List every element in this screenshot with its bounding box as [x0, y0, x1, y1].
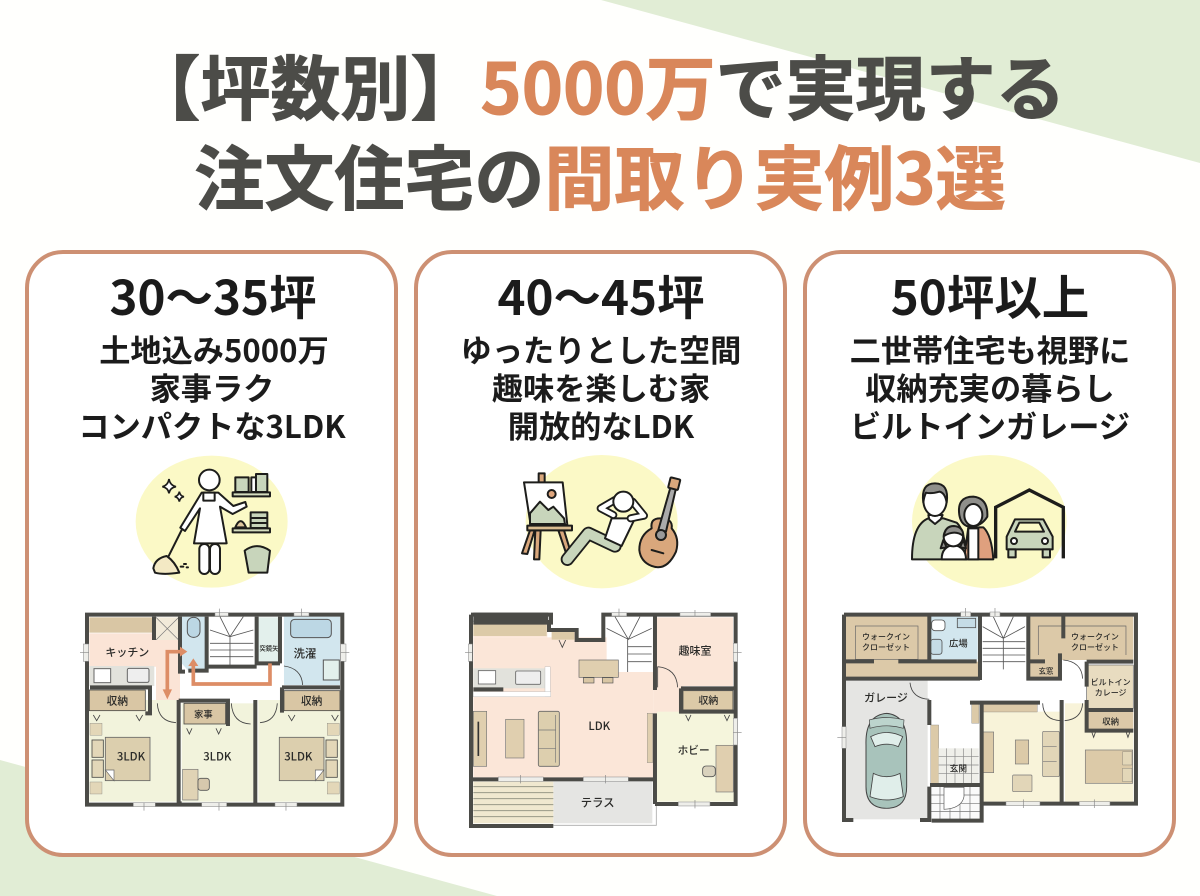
floor plan: 3LDK: 3LDK [117, 749, 146, 765]
floor plan: garage house [837, 608, 1136, 822]
panel description: コンパクトな3LDK [78, 402, 346, 447]
floor plan: 3LDK: 3LDK [284, 749, 313, 765]
title line 1: 【坪数別】5000万で実現する [130, 34, 1066, 135]
floor plan: 3LDK: 突鏡矢 [259, 644, 279, 653]
floor plan: garage house: ウォークイン [862, 631, 910, 642]
floor plan: garage house: 玄窓 [1039, 665, 1054, 676]
background: top-right green wedge [601, 0, 1200, 163]
panel: 50+ tsubo [805, 252, 1174, 855]
background: bottom-left green wedge [0, 760, 497, 896]
panel description: 趣味を楽しむ家 [492, 364, 710, 409]
floor plan: garage house: 収納 [1102, 715, 1119, 727]
icon: housework [136, 456, 288, 588]
floor plan: LDK: ホビー [678, 743, 710, 758]
panel description: ゆったりとした空間 [461, 326, 741, 371]
panel: 40-45 tsubo [416, 252, 785, 855]
panel description: 土地込み5000万 [99, 326, 329, 371]
floor plan: 3LDK: 家事 [194, 706, 213, 720]
panel frame [416, 252, 785, 855]
floor plan: LDK [465, 609, 742, 826]
panel frame [27, 252, 396, 855]
floor plan: LDK: 収納 [698, 692, 718, 707]
title line 2: 注文住宅の間取り実例3選 [194, 124, 1006, 225]
floor plan: LDK: LDK [588, 718, 611, 734]
floor plan: garage house: ウォークイン [1071, 631, 1119, 642]
panel description: ビルトインガレージ [850, 402, 1130, 447]
title [130, 34, 1066, 225]
floor plan: 3LDK: 3LDK [203, 749, 232, 765]
floor plan: 3LDK: キッチン [105, 644, 149, 660]
floor plan: garage house: クローゼット [1071, 642, 1119, 653]
floor plan: garage house: ガレージ [864, 689, 908, 705]
panel description [850, 326, 1130, 447]
panel description [78, 326, 346, 447]
floor plan: garage house: 広場 [949, 636, 968, 650]
panel description: 二世帯住宅も視野に [850, 326, 1130, 371]
panel heading: 40〜45坪 [497, 260, 705, 329]
panel heading: 50坪以上 [891, 260, 1089, 329]
floor plan: garage house: カレージ [1095, 688, 1127, 699]
panel description: 開放的なLDK [508, 402, 695, 447]
panel description: 家事ラク [150, 364, 274, 409]
floor plan: garage house: クローゼット [862, 642, 910, 653]
floor plan: 3LDK: 収納 [301, 694, 322, 709]
panel description [461, 326, 741, 447]
floor plan: 3LDK [80, 609, 349, 811]
floor plan: LDK: 趣味室 [678, 642, 711, 658]
floor plan: 3LDK: 収納 [107, 694, 128, 709]
icon: hobbies [522, 455, 680, 588]
panel frame [805, 252, 1174, 855]
panel heading: 30〜35坪 [109, 260, 317, 329]
panel: 30-35 tsubo [27, 252, 396, 855]
icon: family and garage [912, 455, 1067, 588]
floor plan: garage house: 玄関 [950, 763, 967, 775]
floor plan: 3LDK: 洗濯 [294, 645, 316, 661]
floor plan: garage house: ビルトイン [1091, 677, 1131, 688]
panel description: 収納充実の暮らし [865, 364, 1115, 409]
floor plan: LDK: テラス [581, 795, 615, 811]
